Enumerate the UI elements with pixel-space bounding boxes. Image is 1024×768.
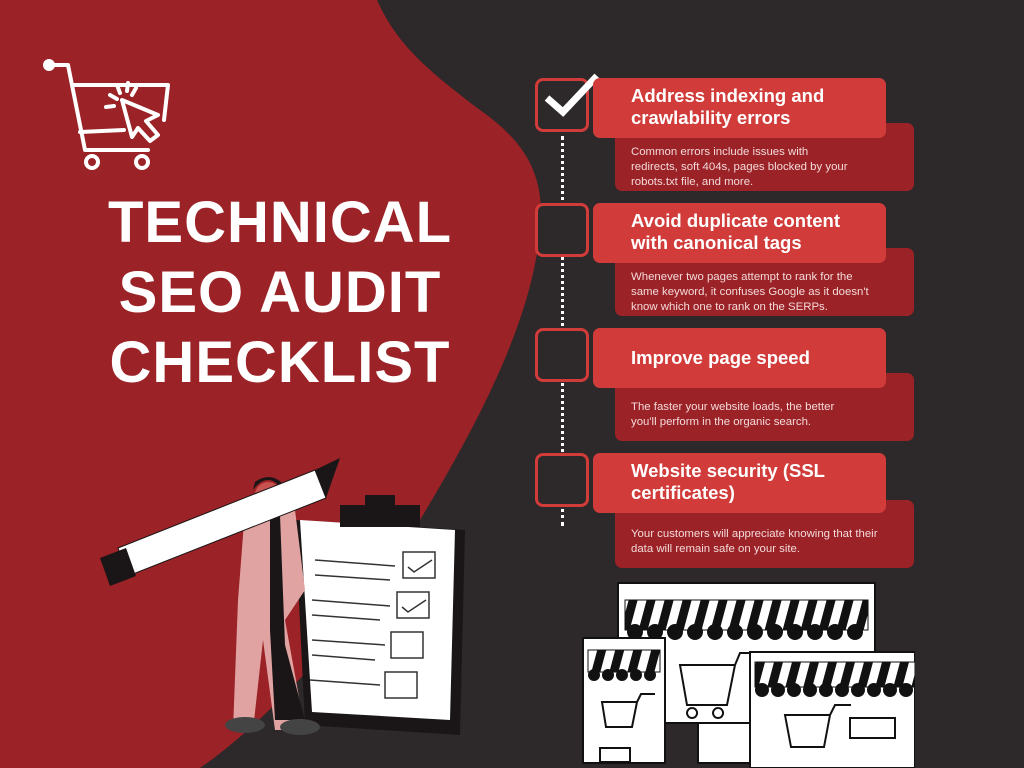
item 3: [535, 328, 914, 441]
item 1: [535, 74, 914, 191]
heading: Avoid duplicate content: [631, 210, 840, 231]
clipboard: [295, 495, 465, 735]
title: CHECKLIST: [110, 330, 450, 395]
check mark: [544, 74, 600, 117]
checkbox checked: [535, 78, 589, 132]
description: know which one to rank on the SERPs.: [631, 301, 828, 313]
heading: [593, 203, 886, 263]
description: Common errors include issues with: [631, 146, 808, 158]
icon: shopping cart with cursor: [43, 59, 170, 170]
heading: [593, 78, 886, 138]
illustration: person with pencil and clipboard: [100, 458, 465, 735]
heading: Improve page speed: [631, 347, 810, 368]
description: you'll perform in the organic search.: [631, 416, 811, 428]
description: The faster your website loads, the better: [631, 401, 834, 413]
heading: crawlability errors: [631, 107, 790, 128]
heading: [593, 453, 886, 513]
description: robots.txt file, and more.: [631, 176, 753, 188]
title: SEO AUDIT: [119, 260, 441, 325]
description: redirects, soft 404s, pages blocked by your: [631, 161, 848, 173]
heading: certificates): [631, 482, 735, 503]
title: [108, 190, 452, 395]
item 4: [535, 453, 914, 568]
description: same keyword, it confuses Google as it doesn't: [631, 286, 869, 298]
description: [615, 373, 914, 441]
heading: Address indexing and: [631, 85, 824, 106]
description: Whenever two pages attempt to rank for the: [631, 271, 853, 283]
person: [233, 510, 305, 730]
left tablet: [583, 638, 665, 763]
illustration: online stores on devices: [582, 582, 915, 768]
description: Your customers will appreciate knowing that their: [631, 528, 878, 540]
heading: Website security (SSL: [631, 460, 825, 481]
heading: with canonical tags: [631, 232, 802, 253]
description: [615, 500, 914, 568]
description: data will remain safe on your site.: [631, 543, 800, 555]
description: [615, 248, 914, 316]
timeline dotted line: [561, 136, 564, 526]
item 2: [535, 203, 914, 316]
title: TECHNICAL: [108, 190, 452, 255]
pencil: [118, 470, 326, 576]
heading: [593, 328, 886, 388]
monitor: [618, 583, 875, 763]
description: [615, 123, 914, 191]
right tablet: [750, 652, 915, 768]
